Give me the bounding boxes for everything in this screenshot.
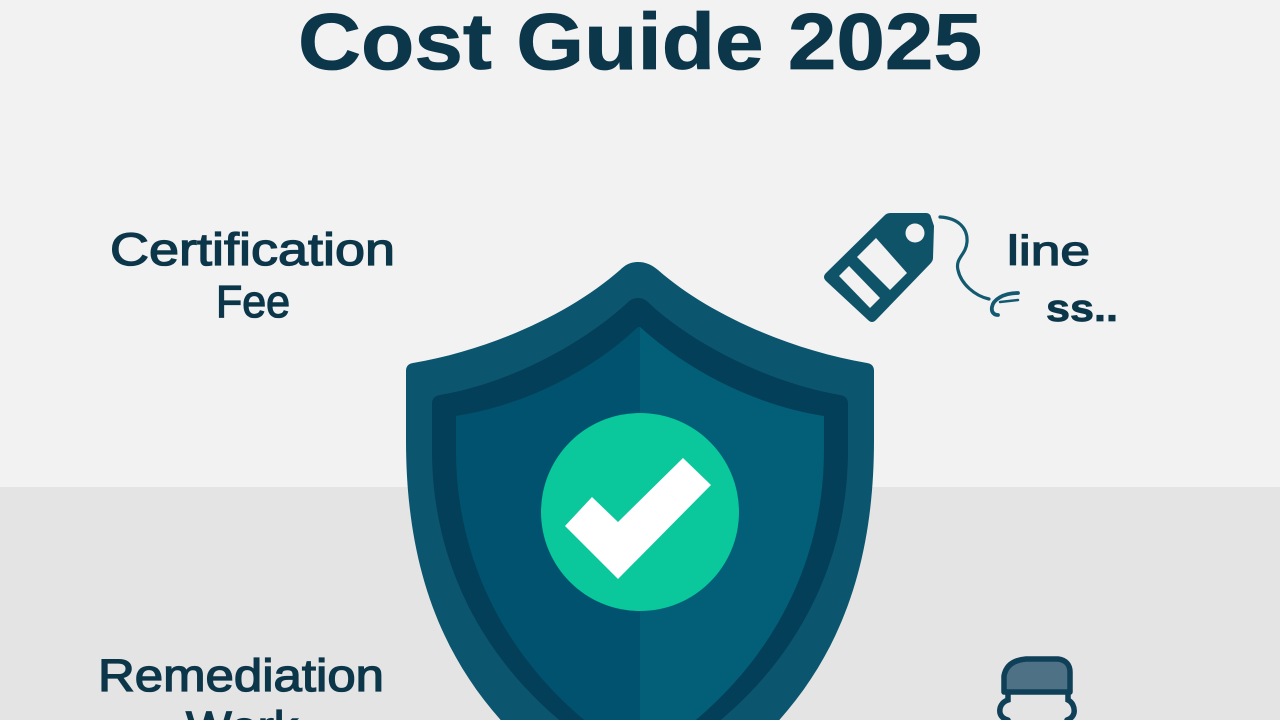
background: lower panel xyxy=(0,487,1280,720)
white check mark xyxy=(565,458,711,579)
shield outer rim xyxy=(406,262,874,720)
label: certification fee: Certification xyxy=(110,224,395,275)
label: remediation work: Remediation xyxy=(98,650,384,701)
label: garbled line text: ss.. xyxy=(1046,288,1118,330)
background: upper panel xyxy=(0,0,1280,487)
icon: person xyxy=(1000,659,1074,720)
icon: price tag xyxy=(824,213,1018,322)
person hair xyxy=(1004,659,1070,692)
shield dark band xyxy=(432,298,848,720)
shield inner left face xyxy=(456,327,640,720)
label: garbled line text: line xyxy=(1007,227,1090,274)
label: garbled line text xyxy=(1007,227,1118,330)
green badge xyxy=(541,413,739,611)
person face outline xyxy=(1000,692,1074,720)
label: certification fee: Fee xyxy=(216,276,290,327)
label: remediation work xyxy=(98,650,384,720)
label: certification fee xyxy=(110,224,395,327)
shield inner right face xyxy=(640,327,824,720)
icon: security shield xyxy=(406,262,874,720)
